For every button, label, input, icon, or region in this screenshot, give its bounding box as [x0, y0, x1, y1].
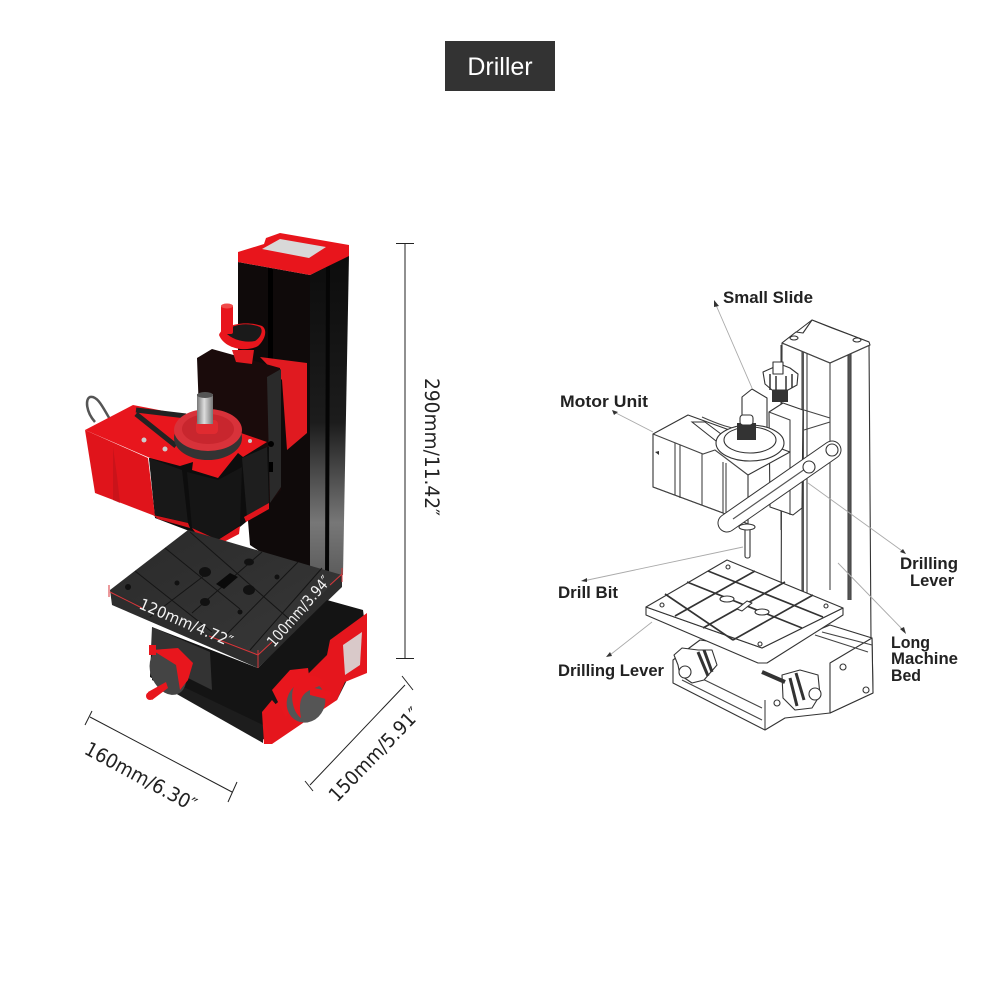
dimension height: 290mm/11.42: 290mm/11.42″: [420, 378, 443, 516]
table dimension: 120mm/4.72: 120mm/4.72″: [136, 595, 236, 651]
column: [238, 233, 349, 590]
ring handle: [87, 397, 111, 422]
adjustment knob: [219, 304, 265, 364]
label: Drill Bit: Drill Bit: [558, 584, 619, 602]
slide block: [197, 349, 307, 503]
drawing drilling lever: [727, 444, 838, 523]
line drawing: machine parts diagram: [558, 289, 958, 730]
drawing column: [781, 320, 871, 640]
label: Long Machine Bed: Bed: [891, 667, 921, 685]
label: Drilling Lever (upper): Lever: [910, 572, 955, 590]
left knob: [142, 643, 194, 701]
label: Motor Unit: Motor Unit: [560, 393, 649, 411]
table dimension: 100mm/3.94: 100mm/3.94″: [263, 572, 335, 651]
drawing slide block: [742, 389, 830, 515]
drawing top knob: [763, 362, 798, 402]
drawing work table: [646, 560, 843, 663]
drawing left knob: [674, 648, 717, 683]
dimension depth: 150mm/5.91: 150mm/5.91″: [324, 703, 425, 806]
work table: [110, 530, 342, 668]
base slide: [150, 600, 367, 744]
title: Driller: Driller: [467, 53, 533, 81]
leader lines with arrowheads: [581, 300, 906, 657]
right knob: [272, 668, 332, 729]
label: Long Machine Bed: [891, 634, 958, 685]
label: Drilling Lever (upper): [900, 555, 958, 590]
dimension depth: 150mm/5.91: [305, 676, 425, 806]
table red measure lines: [109, 568, 342, 668]
title: Driller: [445, 41, 555, 91]
label: Drilling Lever (lower): Drilling Lever: [558, 662, 665, 680]
motor unit: [85, 392, 269, 545]
label: Long Machine Bed: Long: [891, 634, 930, 652]
dimension width: 160mm/6.30: [81, 711, 237, 817]
drawing right knob: [762, 670, 821, 710]
drawing drill bit: [739, 524, 755, 558]
photo: red and black drill machine: [85, 233, 367, 744]
dimension height: 290mm/11.42: [396, 244, 443, 658]
drawing base block: [673, 625, 873, 730]
drill bit: [213, 547, 217, 574]
drawing motor unit: [653, 415, 790, 524]
label: Small Slide: Small Slide: [723, 289, 813, 307]
label: Drilling Lever (upper): Drilling: [900, 555, 958, 573]
dimension width: 160mm/6.30: 160mm/6.30″: [81, 737, 201, 817]
label: Long Machine Bed: Machine: [891, 650, 958, 668]
